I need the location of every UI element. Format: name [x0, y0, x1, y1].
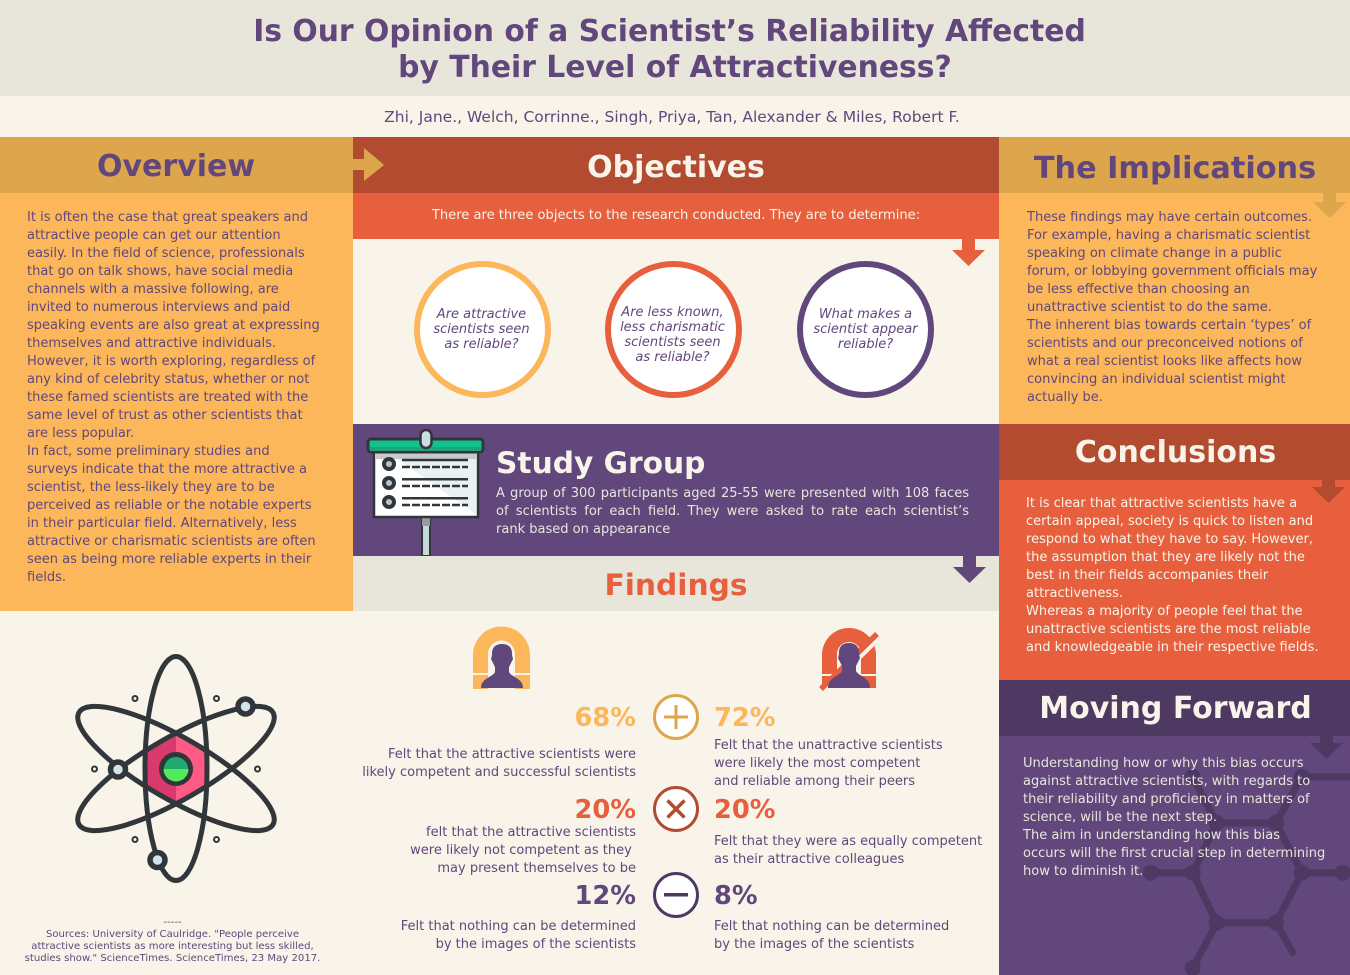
objective 2 text: Are less known, [621, 305, 724, 320]
conclusions text: attractiveness. [1026, 586, 1123, 601]
sources: Sources: University of Caulridge. "People perceive [46, 929, 299, 940]
panel: moving forward [999, 680, 1350, 975]
overview text: In fact, some preliminary studies and [27, 444, 270, 459]
sources: attractive scientists as more interesting but less skilled, [31, 941, 314, 952]
implications text: These findings may have certain outcomes. [1027, 210, 1312, 225]
moving forward text: Understanding how or why this bias occurs [1023, 756, 1304, 771]
stat text: 8%: by the images of the scientists [714, 937, 914, 952]
conclusions text: Whereas a majority of people feel that the [1026, 604, 1303, 619]
implications text: speaking on climate change in a public [1027, 246, 1282, 261]
panel: objectives [353, 137, 999, 239]
moving forward text: how to diminish it. [1023, 864, 1143, 879]
stat text: 72% [714, 738, 943, 789]
moving forward heading: Moving Forward [1039, 691, 1312, 726]
overview text: scientist, the less-likely they are to be [27, 480, 275, 495]
stat text: right 20% [714, 834, 982, 867]
arrow: implications [1313, 193, 1346, 218]
conclusions text: respond to what they have to say. However, [1026, 532, 1313, 547]
overview header [0, 137, 353, 193]
conclusions text: unattractive scientists are the most reliable [1026, 622, 1311, 637]
stat text: 68%: likely competent and successful scientists [362, 765, 636, 780]
objective 3 text: What makes a [819, 307, 912, 322]
panel: implications [999, 137, 1350, 424]
arrow: overview to objectives [353, 148, 384, 181]
conclusions heading: Conclusions [1075, 435, 1276, 470]
authors: Zhi, Jane., Welch, Corrinne., Singh, Priya, Tan, Alexander & Miles, Robert F. [384, 108, 960, 126]
findings heading: Findings [604, 568, 748, 603]
objective 1 text: scientists seen [433, 322, 530, 337]
stat text: 72%: Felt that the unattractive scientists [714, 738, 943, 753]
moving forward header [999, 680, 1350, 736]
objective 2 text: less charismatic [620, 320, 725, 335]
icon: atom [75, 654, 277, 883]
objectives heading: Objectives [587, 150, 765, 185]
overview text: same level of trust as other scientists that [27, 408, 303, 423]
icon: minus [653, 872, 699, 918]
overview text: attractive people can get our attention [27, 228, 281, 243]
objective 1 text: Are attractive [437, 307, 526, 322]
conclusions text: and knowledgeable in their respective fields. [1026, 640, 1318, 655]
stat text: left 20% [410, 825, 636, 876]
stat text: 12%: by the images of the scientists [436, 937, 636, 952]
title banner [0, 0, 1350, 96]
overview text: that go on talk shows, have social media [27, 264, 293, 279]
moving forward text: their reliability and proficiency in matters of [1023, 792, 1310, 807]
implications text: unattractive scientist to do the same. [1027, 300, 1272, 315]
overview text: It is often the case that great speakers and [27, 210, 308, 225]
stat text: 8%: Felt that nothing can be determined [714, 919, 949, 934]
stat text: left 20%: were likely not competent as they [410, 843, 632, 858]
objective 3 text [813, 307, 918, 352]
overview text [27, 210, 320, 585]
stat text: 72%: and reliable among their peers [714, 774, 915, 789]
objective 2 text: as reliable? [635, 350, 710, 365]
sources [25, 917, 320, 964]
stat text: right 20%: as their attractive colleagues [714, 852, 904, 867]
overview text: are less popular. [27, 426, 134, 441]
overview text: surveys indicate that the more attractive a [27, 462, 307, 477]
icon: cross [653, 786, 699, 832]
stat: 8%: 8% [714, 881, 758, 911]
objective circle 2 [605, 261, 742, 398]
objectives intro: There are three objects to the research conducted. They are to determine: [432, 208, 920, 223]
overview text: speaking events are also great at expressing [27, 318, 320, 333]
stat text: 68% [362, 747, 636, 780]
objective 1 text [433, 307, 530, 352]
implications text: what a real scientist looks like affects how [1027, 354, 1302, 369]
study group text: A group of 300 participants aged 25-55 were presented with 108 faces [496, 486, 969, 501]
overview heading: Overview [97, 149, 255, 184]
overview text: easily. In the field of science, professionals [27, 246, 305, 261]
stat text: 72%: were likely the most competent [714, 756, 920, 771]
study group text: of scientists for each field. They were asked to rate each scientist’s [496, 504, 969, 519]
study group text [496, 486, 969, 537]
implications text: be less effective than choosing an [1027, 282, 1250, 297]
moving forward text: science, will be the next step. [1023, 810, 1217, 825]
stat text: right 20%: Felt that they were as equally competent [714, 834, 982, 849]
panel: study group [353, 424, 999, 556]
stat text: 12% [401, 919, 636, 952]
implications text: forum, or lobbying government officials may [1027, 264, 1317, 279]
panel: findings header [353, 556, 999, 611]
icon: plus [653, 694, 699, 740]
stat text: 12%: Felt that nothing can be determined [401, 919, 636, 934]
overview text: attractive or charismatic scientists are often [27, 534, 316, 549]
overview text: seen as being more reliable experts in their [27, 552, 311, 567]
objective 2 text [620, 305, 725, 365]
objective 3 text: scientist appear [813, 322, 918, 337]
stat text: 8% [714, 919, 949, 952]
moving forward text: The aim in understanding how this bias [1023, 828, 1280, 843]
implications text: convincing an individual scientist might [1027, 372, 1285, 387]
conclusions header [999, 424, 1350, 480]
overview text: these famed scientists are treated with the [27, 390, 308, 405]
sources: studies show." ScienceTimes. ScienceTimes, 23 May 2017. [25, 953, 320, 964]
title [253, 14, 1086, 85]
implications text: For example, having a charismatic scientist [1027, 228, 1310, 243]
conclusions text: It is clear that attractive scientists have a [1026, 496, 1297, 511]
objective 2 text: scientists seen [624, 335, 721, 350]
stat: 72%: 72% [714, 703, 776, 733]
overview text: themselves and attractive individuals. [27, 336, 276, 351]
stat: 68%: 68% [574, 703, 636, 733]
icon: unattractive person crossed out [819, 628, 879, 691]
overview text: in their particular field. Alternatively, less [27, 516, 297, 531]
objectives subheader [353, 193, 999, 239]
implications heading: The Implications [1034, 151, 1316, 186]
conclusions text: best in their fields accompanies their [1026, 568, 1268, 583]
panel: overview [0, 137, 353, 611]
stat: 12%: 12% [574, 881, 636, 911]
implications header [999, 137, 1350, 193]
implications text: actually be. [1027, 390, 1103, 405]
arrow: moving forward [1310, 736, 1343, 759]
overview text: any kind of celebrity status, whether or not [27, 372, 309, 387]
implications text [1026, 210, 1317, 405]
icon: attractive person [473, 626, 530, 689]
overview text: invited to numerous interviews and paid [27, 300, 290, 315]
stat: right 20%: 20% [714, 795, 776, 825]
moving forward text: occurs will the first crucial step in determining [1023, 846, 1325, 861]
sources: ----- [163, 917, 182, 928]
stat text: 68%: Felt that the attractive scientists were [388, 747, 636, 762]
moving forward text [1022, 756, 1325, 879]
stat: left 20%: 20% [574, 795, 636, 825]
panel: conclusions [999, 424, 1350, 680]
conclusions text: the assumption that they are likely not the [1026, 550, 1305, 565]
moving forward text: against attractive scientists, with regards to [1023, 774, 1310, 789]
title: by Their Level of Attractiveness? [398, 50, 952, 85]
implications text: scientists and our preconceived notions of [1027, 336, 1303, 351]
objective circle 1 [414, 261, 551, 398]
stat text: left 20%: felt that the attractive scientists [426, 825, 636, 840]
objective circle 3 [797, 261, 934, 398]
arrow: study group down [953, 556, 986, 583]
implications text: The inherent bias towards certain ‘types’ of [1027, 318, 1311, 333]
icon: presentation board [366, 428, 484, 556]
study group heading: Study Group [496, 446, 705, 481]
title: Is Our Opinion of a Scientist’s Reliability Affected [253, 14, 1086, 49]
objective 3 text: reliable? [838, 337, 893, 352]
overview text: However, it is worth exploring, regardless of [27, 354, 315, 369]
arrow: objectives down [952, 239, 985, 266]
overview text: perceived as reliable or the notable experts [27, 498, 312, 513]
arrow: conclusions [1312, 480, 1345, 503]
conclusions text: certain appeal, society is quick to listen and [1026, 514, 1313, 529]
conclusions text [1026, 496, 1318, 655]
objective 1 text: as reliable? [444, 337, 519, 352]
stat text: left 20%: may present themselves to be [437, 861, 636, 876]
overview text: channels with a massive following, are [27, 282, 279, 297]
study group text: rank based on appearance [496, 522, 670, 537]
overview text: fields. [27, 570, 66, 585]
